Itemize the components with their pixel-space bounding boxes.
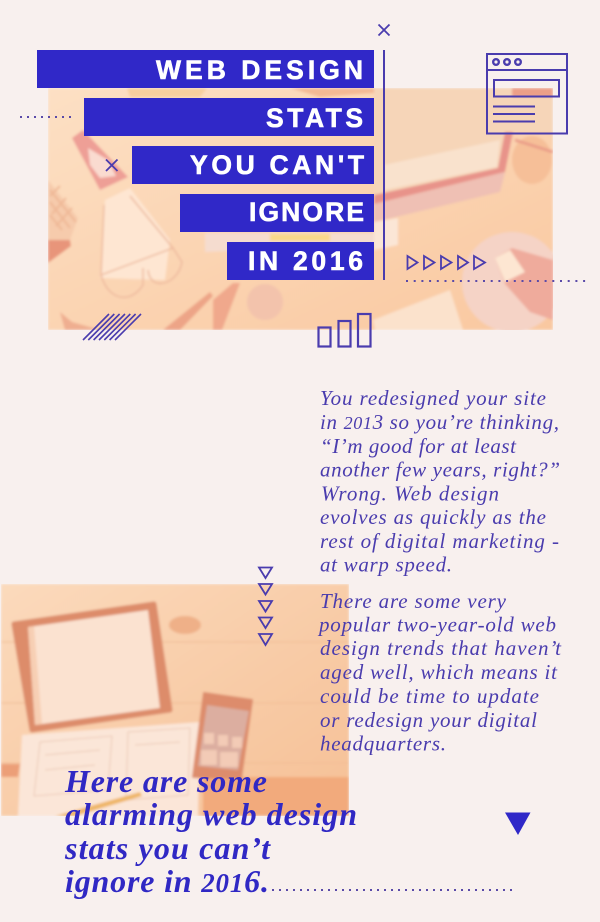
title bar: ignore: IGNORE — [249, 197, 364, 227]
heading: here are some alarming web design stats: stats you can’t — [64, 830, 271, 866]
title bar: in 2016: IN 2016 — [248, 246, 363, 276]
title bar: stats — [84, 98, 374, 136]
icon: downward triangles — [259, 568, 272, 645]
paragraph: redesign advice: or redesign your digital — [320, 708, 537, 732]
photo: tablet, phone and wireframe sketches on wood — [1, 584, 349, 816]
paragraph: intro: evolves as quickly as the — [320, 505, 546, 529]
title bar: ignore — [180, 194, 374, 232]
paragraph: redesign advice: could be time to update — [320, 684, 539, 708]
paragraph: redesign advice: There are some very — [320, 589, 507, 613]
title bar: web design — [37, 50, 374, 88]
paragraph: intro — [320, 386, 560, 576]
photo: desk with monitor, glasses and keyboard — [48, 88, 562, 332]
paragraph: intro: “I’m good for at least — [320, 434, 517, 458]
paragraph: redesign advice: aged well, which means it — [320, 660, 558, 684]
paragraph: intro: another few years, right?” — [320, 458, 560, 482]
paragraph: redesign advice — [317, 589, 562, 756]
icon: right-pointing triangles — [408, 256, 485, 269]
icon: bar chart — [318, 314, 370, 346]
icon: browser window — [487, 54, 567, 134]
dotted line: after heading — [272, 889, 512, 891]
paragraph: intro: rest of digital marketing - — [320, 529, 559, 553]
icon: diagonal stripes — [83, 314, 141, 340]
paragraph: redesign advice: design trends that haven’t — [320, 636, 562, 660]
icon: cross top — [378, 24, 390, 36]
dotted line: right — [406, 280, 586, 282]
vertical rule — [383, 50, 385, 280]
heading: here are some alarming web design stats: ignore in 2016. — [65, 863, 269, 899]
heading: here are some alarming web design stats — [64, 763, 357, 899]
icon: solid down triangle — [505, 812, 530, 835]
title bar: stats: STATS — [266, 103, 363, 133]
icon: cross on photo — [106, 160, 118, 171]
title bar: in 2016 — [227, 242, 374, 280]
title bar: you can't: YOU CAN'T — [190, 150, 364, 180]
paragraph: intro: in 2013 so you’re thinking, — [320, 410, 559, 434]
title bar: you can't — [132, 146, 374, 184]
heading: here are some alarming web design stats: alarming web design — [65, 796, 357, 832]
paragraph: intro: You redesigned your site — [320, 386, 546, 410]
dotted line: left — [20, 116, 71, 118]
title: web design stats you can't ignore in 2016 — [37, 50, 374, 280]
heading: here are some alarming web design stats: Here are some — [64, 763, 267, 799]
paragraph: redesign advice: popular two-year-old web — [317, 612, 556, 636]
title bar: web design: WEB DESIGN — [156, 55, 363, 85]
paragraph: redesign advice: headquarters. — [320, 732, 446, 756]
paragraph: intro: at warp speed. — [320, 552, 452, 576]
paragraph: intro: Wrong. Web design — [321, 482, 499, 506]
